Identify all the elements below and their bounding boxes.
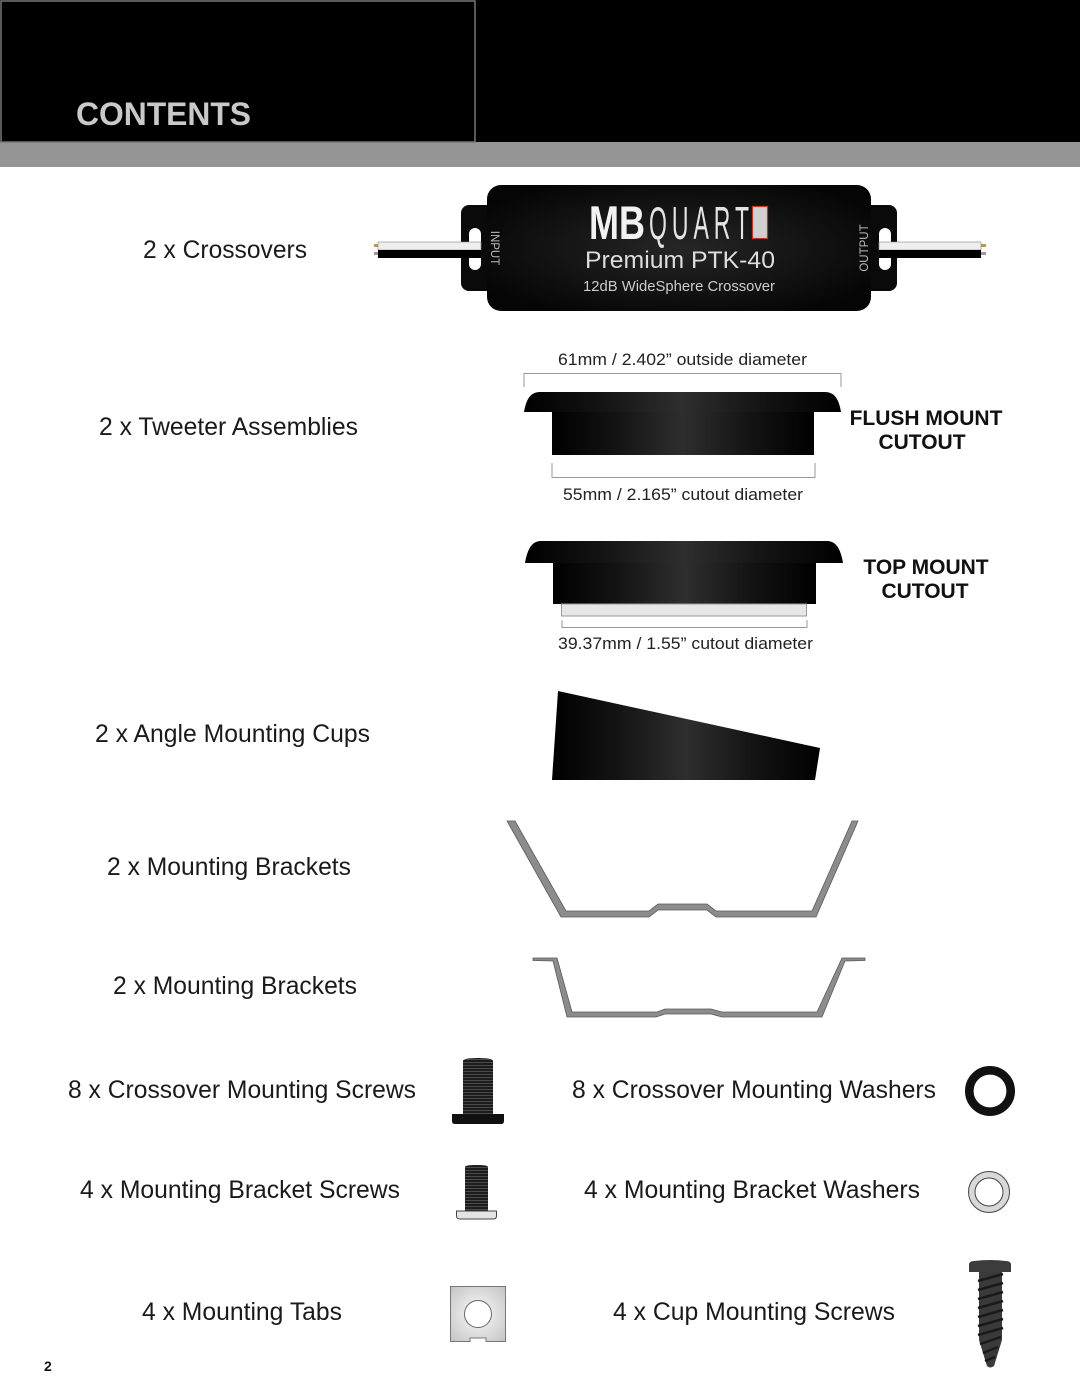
icon: crossover mounting screw — [452, 1058, 504, 1124]
model name: Premium PTK-40 — [585, 247, 775, 274]
label: mounting tabs: 4 x Mounting Tabs — [142, 1298, 342, 1326]
logo — [589, 196, 768, 249]
top mount tweeter diagram — [525, 541, 843, 653]
shallow mounting bracket — [533, 958, 865, 1017]
logo: QUART — [649, 197, 749, 249]
page number: 2 — [44, 1358, 52, 1374]
angle mounting cup — [552, 691, 820, 780]
crossover unit illustration — [374, 185, 986, 311]
icon: mounting tab — [450, 1286, 506, 1342]
icon: cup mounting screw — [969, 1260, 1011, 1368]
logo: MB — [589, 196, 645, 249]
flush mount heading: CUTOUT — [878, 431, 966, 454]
flush mount tweeter diagram — [524, 350, 841, 504]
label: crossovers: 2 x Crossovers — [143, 236, 307, 264]
top mount tweeter diagram: 39.37mm / 1.55” cutout diameter — [558, 634, 813, 653]
subtitle: 12dB WideSphere Crossover — [583, 279, 775, 295]
flush mount heading: FLUSH MOUNT — [850, 407, 1003, 430]
top mount heading — [863, 556, 989, 603]
top mount heading: TOP MOUNT — [863, 556, 989, 579]
label: tweeter assemblies: 2 x Tweeter Assemblies — [99, 413, 358, 441]
label: crossover mounting screws: 8 x Crossover Mounting Screws — [68, 1076, 416, 1104]
flush mount heading — [850, 407, 1003, 454]
label: angle mounting cups: 2 x Angle Mounting Cups — [95, 720, 370, 748]
icon: bracket washer — [968, 1172, 1010, 1212]
label: bracket screws: 4 x Mounting Bracket Screws — [80, 1176, 400, 1204]
label: cup mounting screws: 4 x Cup Mounting Screws — [613, 1298, 895, 1326]
label: crossover mounting washers: 8 x Crossover Mounting Washers — [572, 1076, 936, 1104]
flush mount tweeter diagram: 61mm / 2.402” outside diameter — [558, 350, 807, 369]
output label: OUTPUT — [859, 224, 871, 272]
label: bracket washers: 4 x Mounting Bracket Washers — [584, 1176, 920, 1204]
label: mounting brackets second: 2 x Mounting Brackets — [113, 972, 357, 1000]
header band — [0, 0, 1080, 167]
icon: crossover washer — [969, 1070, 1011, 1112]
icon: bracket screw — [456, 1165, 496, 1219]
deep mounting bracket — [507, 821, 858, 917]
input label: INPUT — [488, 231, 500, 265]
flush mount tweeter diagram: 55mm / 2.165” cutout diameter — [563, 485, 803, 504]
title: CONTENTS — [76, 96, 251, 132]
top mount heading: CUTOUT — [881, 580, 969, 603]
label: mounting brackets: 2 x Mounting Brackets — [107, 853, 351, 881]
